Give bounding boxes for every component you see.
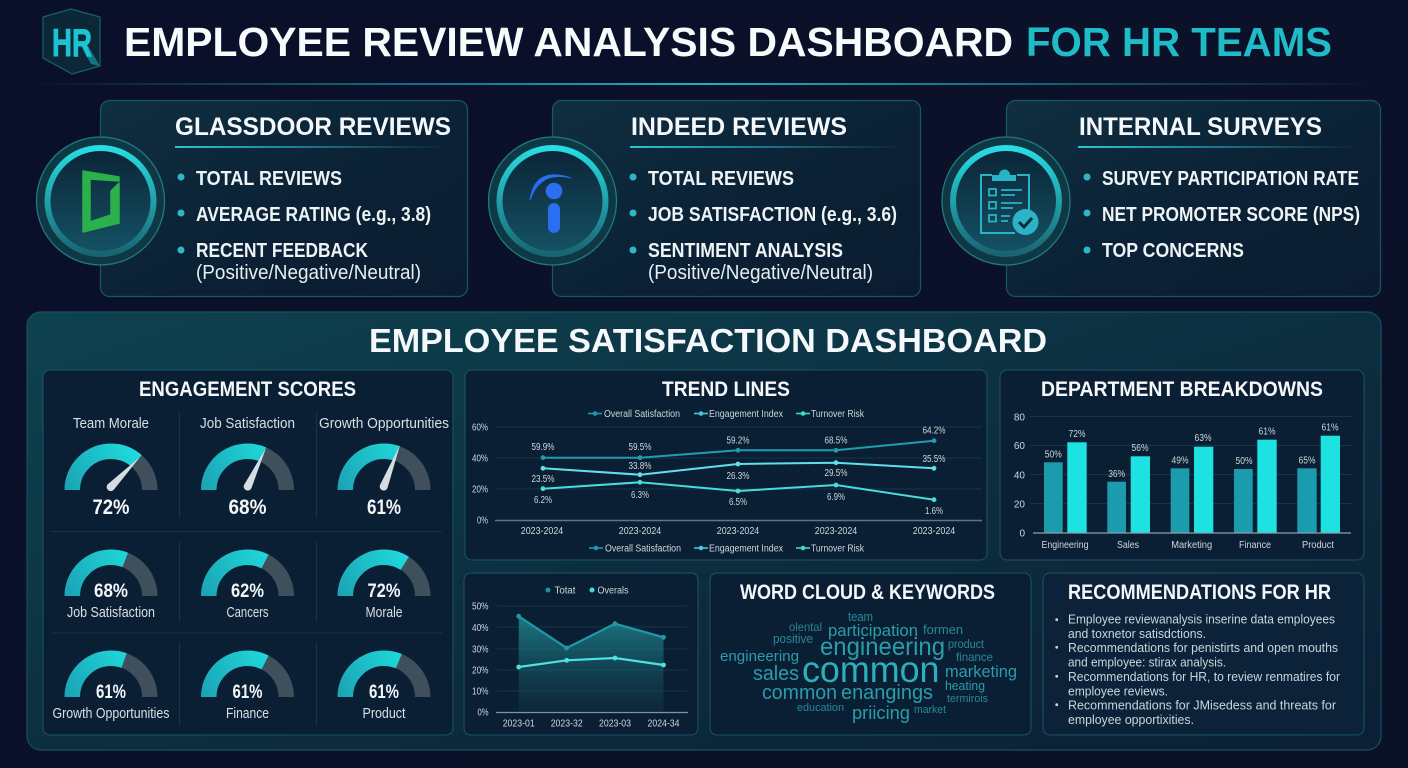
heading: Internal surveys: INTERNAL SURVEYS: [1079, 113, 1322, 141]
word cloud: common: [762, 682, 837, 704]
bar chart: departments: 50%: [1236, 456, 1253, 467]
logo: HR shield: HR: [52, 22, 92, 65]
list: recommendations: and employee: stirax analysis.: [1068, 656, 1226, 670]
gauge: Team Morale 72%: Team Morale: [73, 416, 149, 432]
line chart: trends: 33.8%: [628, 461, 652, 472]
legend: trend lines top: [588, 409, 865, 420]
list: Internal survey metrics: [1084, 168, 1360, 262]
logo: HR shield: [43, 9, 100, 74]
list: recommendations: and toxnetor satisdctions.: [1068, 627, 1206, 641]
title: EMPLOYEE REVIEW ANALYSIS DASHBOARD: [124, 19, 1013, 65]
list: recommendations: employee reviews.: [1068, 684, 1168, 698]
list: recommendations: Recommendations for HR, to review renmatires for: [1068, 670, 1340, 684]
heading: Indeed reviews: INDEED REVIEWS: [631, 113, 847, 141]
word cloud: olental: [789, 620, 822, 634]
bar chart: departments: Sales: [1117, 540, 1139, 551]
word cloud: heating: [945, 678, 985, 693]
bar chart: departments: Marketing: [1171, 540, 1212, 551]
gauge: Product 61%: 61%: [369, 682, 399, 703]
word cloud: finance: [956, 650, 993, 664]
word cloud: product: [948, 639, 985, 651]
word cloud: sales: [753, 663, 799, 685]
gauge: Job Satisfaction 68% row two: Job Satisfaction: [67, 605, 155, 621]
area chart: totals and overall: [472, 602, 688, 730]
word cloud: team: [848, 609, 873, 624]
legend: trend lines bottom: [589, 544, 865, 554]
gauge: Cancers 62%: 62%: [231, 581, 264, 602]
panel: Glassdoor reviews: [100, 100, 468, 296]
list: Internal survey metrics: NET PROMOTER SCORE (NPS): [1102, 204, 1360, 226]
bar chart: departments: Finance: [1239, 540, 1271, 551]
panel: trend lines: [465, 370, 987, 560]
word cloud: formen: [923, 622, 963, 637]
gauge: Finance 61%: 61%: [232, 682, 263, 703]
area chart: totals and overall: 30%: [472, 644, 489, 656]
gauge: Growth Opportunities 61%: 61%: [367, 496, 401, 519]
word cloud: [720, 609, 1017, 723]
bar chart: departments: 63%: [1194, 433, 1212, 444]
line chart: trends: 20%: [472, 484, 488, 496]
area chart: totals and overall: 2023-32: [551, 718, 583, 730]
legend: trend lines top: Turnover Risk: [811, 409, 865, 420]
bar chart: departments: 61%: [1258, 426, 1276, 438]
heading: word cloud: WORD CLOUD & KEYWORDS: [740, 581, 995, 604]
word cloud: common: [802, 649, 940, 690]
bar chart: departments: 49%: [1172, 456, 1189, 466]
area chart: totals and overall: 20%: [472, 666, 489, 676]
panel: department breakdowns: [1000, 370, 1364, 560]
legend: area chart: Overals: [598, 586, 628, 596]
title: FOR HR TEAMS: [1026, 19, 1332, 65]
gauge: Job Satisfaction 68% row two: [67, 557, 155, 621]
bar chart: departments: 56%: [1132, 443, 1149, 454]
legend: trend lines bottom: Overall Satisfaction: [605, 544, 681, 554]
heading: engagement scores: ENGAGEMENT SCORES: [139, 378, 356, 401]
gauge: Product 61%: Product: [362, 706, 406, 722]
line chart: trends: 6.3%: [631, 490, 649, 501]
area chart: totals and overall: 0%: [478, 708, 489, 718]
bar chart: departments: 65%: [1298, 456, 1316, 466]
line chart: trends: 26.3%: [726, 471, 750, 482]
line chart: trends: 59.2%: [726, 436, 750, 446]
icon: Glassdoor badge: [36, 137, 164, 265]
line chart: trends: 68.5%: [824, 436, 848, 446]
panel: recommendations for HR: [1043, 573, 1364, 735]
bar chart: departments: 60: [1014, 441, 1025, 452]
line chart: trends: 2023-2024: [521, 526, 564, 537]
word cloud: termirois: [947, 693, 988, 705]
bar chart: departments: 50%: [1045, 450, 1062, 460]
bar chart: departments: 36%: [1108, 469, 1125, 480]
list: Glassdoor metrics: AVERAGE RATING (e.g., 3.8): [196, 204, 431, 226]
heading: recommendations: RECOMMENDATIONS FOR HR: [1068, 581, 1331, 604]
legend: trend lines bottom: Turnover Risk: [811, 544, 865, 554]
line chart: trends: 23.5%: [532, 474, 555, 485]
gauge: Morale 72%: Morale: [366, 605, 402, 621]
list: Internal survey metrics: TOP CONCERNS: [1102, 240, 1244, 262]
list: recommendations: Employee reviewanalysis inserine data employees: [1068, 612, 1335, 626]
area chart: totals and overall: 50%: [472, 602, 489, 612]
heading: Glassdoor reviews: GLASSDOOR REVIEWS: [175, 113, 451, 141]
line chart: trends: [472, 422, 982, 537]
area chart: totals and overall: 2023-03: [599, 718, 631, 730]
panel: Indeed reviews: [552, 100, 920, 296]
gauge: Job Satisfaction 68% row two: 68%: [94, 581, 128, 602]
line chart: trends: 2023-2024: [619, 526, 662, 537]
word cloud: enangings: [841, 682, 933, 704]
list: Glassdoor metrics: RECENT FEEDBACK: [196, 240, 368, 262]
legend: trend lines top: Engagement Index: [709, 409, 783, 420]
panel: Employee satisfaction dashboard: [27, 312, 1381, 750]
line chart: trends: 64.2%: [922, 426, 946, 436]
gauge: Growth Opportunities 61%: Growth Opportunities: [319, 416, 449, 432]
area chart: totals and overall: 10%: [472, 686, 489, 698]
gauge: Morale 72%: 72%: [368, 581, 401, 602]
gauge: Product 61%: [345, 658, 423, 722]
gauge: Cancers 62%: [209, 557, 286, 621]
gauge: Cancers 62%: Cancers: [226, 605, 268, 621]
list: recommendations: [1055, 612, 1340, 727]
area chart: totals and overall: 2024-34: [648, 718, 680, 730]
area chart: totals and overall: 40%: [472, 623, 489, 634]
bar chart: departments: 0: [1019, 528, 1025, 540]
list: Indeed metrics: TOTAL REVIEWS: [648, 168, 794, 190]
gauge: Growth Opportunities 61% row three: Growth Opportunities: [52, 706, 170, 722]
list: Glassdoor metrics: [178, 168, 431, 284]
bar chart: departments: Product: [1302, 540, 1334, 551]
gauge: Growth Opportunities 61% row three: [52, 658, 170, 722]
line chart: trends: 29.5%: [824, 468, 848, 479]
list: Indeed metrics: (Positive/Negative/Neutral): [648, 262, 873, 284]
line chart: trends: 59.5%: [628, 442, 652, 453]
word cloud: participation: [828, 621, 918, 640]
line chart: trends: 35.5%: [922, 454, 946, 465]
gauge: Growth Opportunities 61% row three: 61%: [96, 682, 126, 703]
gauge: Job Satisfaction 68%: [200, 416, 295, 519]
list: Glassdoor metrics: TOTAL REVIEWS: [196, 168, 342, 190]
heading: Employee satisfaction dashboard: EMPLOYEE SATISFACTION DASHBOARD: [369, 322, 1047, 359]
icon: Indeed badge: [488, 137, 616, 265]
line chart: trends: 59.9%: [532, 442, 555, 453]
panel: Internal surveys: [1006, 100, 1380, 296]
line chart: trends: 60%: [472, 422, 488, 434]
bar chart: departments: 72%: [1068, 429, 1086, 440]
legend: area chart: [546, 586, 628, 596]
word cloud: marketing: [945, 662, 1017, 681]
line chart: trends: 2023-2024: [815, 526, 858, 537]
bar chart: departments: 61%: [1322, 422, 1339, 434]
gauge: Job Satisfaction 68%: 68%: [228, 496, 267, 519]
bar chart: departments: Engineering: [1042, 540, 1088, 551]
heading: trend lines: TREND LINES: [662, 378, 790, 401]
line chart: trends: 0%: [477, 516, 488, 526]
gauge: Team Morale 72%: [72, 416, 150, 519]
bar chart: departments: [1014, 412, 1352, 551]
panel: area chart: [464, 573, 698, 735]
word cloud: priicing: [852, 703, 910, 723]
list: Indeed metrics: [630, 168, 897, 284]
line chart: trends: 6.2%: [534, 495, 552, 506]
heading: department breakdowns: DEPARTMENT BREAKDOWNS: [1041, 378, 1323, 401]
gauge: Growth Opportunities 61%: [319, 416, 449, 519]
line chart: trends: 6.5%: [729, 497, 747, 508]
line chart: trends: 1.6%: [925, 506, 943, 517]
icon: clipboard badge: [942, 137, 1070, 265]
word cloud: engineering: [820, 633, 945, 661]
list: Indeed metrics: SENTIMENT ANALYSIS: [648, 240, 843, 262]
panel: engagement scores: [43, 370, 453, 735]
list: recommendations: Recommendations for JMisedess and threats for: [1068, 698, 1336, 712]
gauge: Job Satisfaction 68%: Job Satisfaction: [200, 416, 295, 432]
line chart: trends: 40%: [472, 454, 488, 464]
legend: trend lines top: Overall Satisfaction: [604, 409, 680, 420]
bar chart: departments: 20: [1014, 500, 1025, 510]
area chart: totals and overall: 2023-01: [503, 718, 535, 730]
gauge: Team Morale 72%: 72%: [92, 496, 130, 519]
bar chart: departments: 80: [1014, 412, 1025, 424]
line chart: trends: 2023-2024: [913, 526, 956, 537]
line chart: trends: 2023-2024: [717, 526, 760, 537]
legend: area chart: Totat: [554, 586, 576, 596]
word cloud: positive: [773, 631, 813, 646]
panel: word cloud and keywords: [710, 573, 1031, 735]
list: recommendations: employee opportixities.: [1068, 713, 1194, 727]
gauge: Finance 61%: [209, 658, 286, 722]
gauge: Finance 61%: Finance: [226, 706, 269, 722]
word cloud: engineering: [720, 648, 799, 665]
list: Internal survey metrics: SURVEY PARTICIPATION RATE: [1102, 168, 1359, 190]
legend: trend lines bottom: Engagement Index: [709, 544, 783, 554]
word cloud: education: [797, 702, 844, 714]
list: Glassdoor metrics: (Positive/Negative/Neutral): [196, 262, 421, 284]
list: recommendations: Recommendations for penistirts and open mouths: [1068, 641, 1338, 655]
gauge: Morale 72%: [345, 557, 423, 621]
bar chart: departments: 40: [1014, 470, 1025, 482]
line chart: trends: 6.9%: [827, 492, 845, 503]
word cloud: market: [914, 704, 946, 716]
list: Indeed metrics: JOB SATISFACTION (e.g., 3.6): [648, 204, 897, 226]
